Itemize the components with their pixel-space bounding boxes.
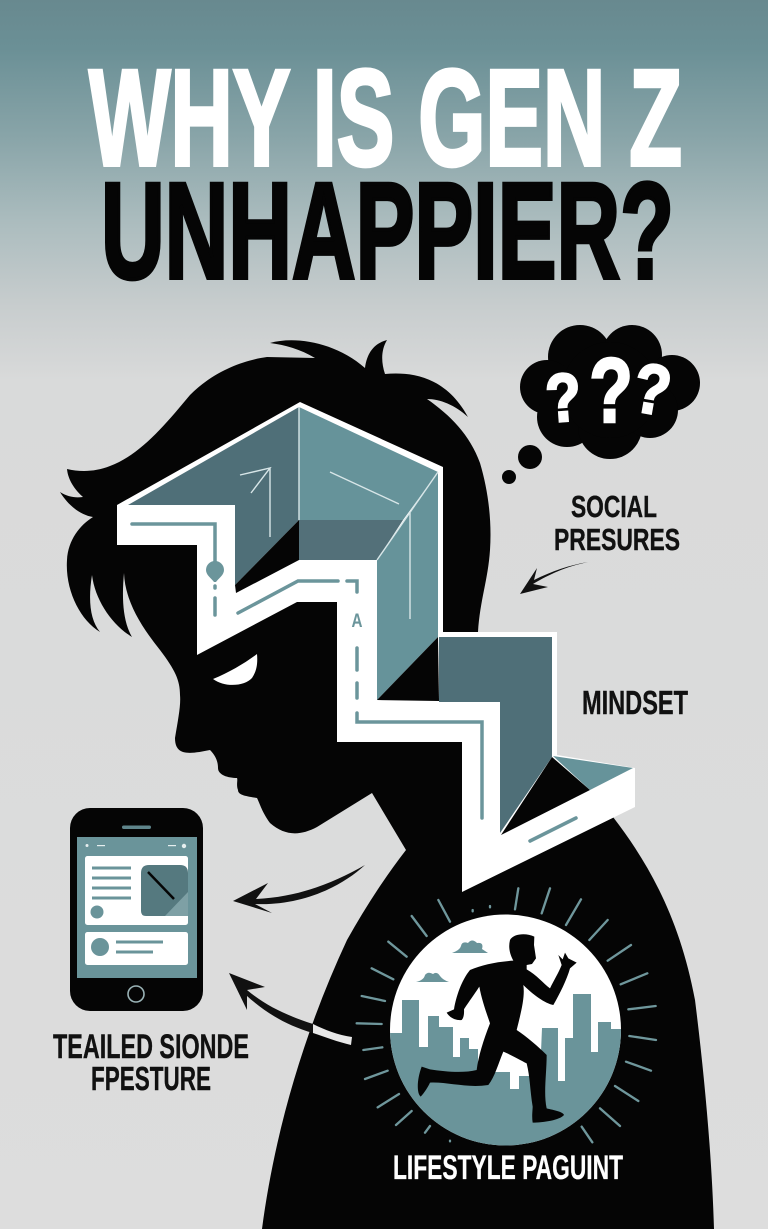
image corner shade	[165, 892, 188, 916]
mid dark floor panel	[299, 520, 403, 560]
lifestyle medallion	[357, 888, 656, 1150]
phone screen	[77, 837, 197, 978]
clouds	[416, 940, 488, 982]
letter A marker: A	[352, 611, 363, 632]
location pin icon	[206, 561, 224, 582]
silhouette: head and shoulders	[60, 340, 714, 1229]
medallion disc	[390, 914, 621, 1146]
title	[89, 42, 682, 308]
staircase diagram in the head	[117, 402, 635, 892]
label: teailed sionde fpesture	[53, 1028, 249, 1097]
question marks	[543, 339, 677, 442]
content card 1	[85, 856, 188, 925]
label: lifestyle paguint: LIFESTYLE PAGUINT	[393, 1149, 623, 1187]
white staircase outline	[117, 402, 635, 892]
light right wall	[377, 472, 438, 700]
phone body	[70, 808, 203, 1011]
label: teailed sionde fpesture: TEAILED SIONDE	[53, 1028, 249, 1066]
arrow: towards phone lower	[229, 973, 352, 1045]
running figure	[418, 934, 577, 1123]
label: mindset: MINDSET	[582, 684, 688, 721]
thought cloud	[502, 325, 700, 484]
question marks: ?	[627, 347, 677, 431]
city skyline	[385, 994, 625, 1150]
teal route lines on the staircase	[132, 524, 576, 841]
card 1 avatar	[90, 906, 104, 918]
question marks: ?	[543, 360, 584, 437]
label: social presures: PRESURES	[554, 522, 680, 557]
thin white panel lines	[240, 407, 438, 619]
label: social presures: SOCIAL	[571, 489, 657, 524]
arrow: towards phone upper	[233, 865, 365, 913]
arrow shaft and head	[229, 973, 313, 1033]
dark lower panel	[439, 637, 552, 833]
radiating rays	[357, 888, 656, 1142]
card 2 avatar	[91, 938, 109, 956]
dark left wall	[128, 407, 299, 585]
eye	[213, 654, 257, 685]
teal lower triangle	[553, 756, 633, 790]
label: teailed sionde fpesture: FPESTURE	[91, 1060, 211, 1097]
light ceiling panel	[299, 407, 438, 520]
black wedge middle	[377, 637, 439, 701]
status bar	[86, 844, 186, 848]
black wedge lower	[501, 757, 590, 835]
white shaft end on shoulder	[313, 1024, 352, 1045]
question marks: ?	[589, 339, 633, 442]
cloud shape	[502, 325, 700, 484]
arrow: social presures	[520, 562, 588, 594]
image diagonal line	[148, 872, 174, 899]
card 2 lines	[116, 942, 163, 952]
phone icon	[70, 808, 203, 1011]
card 1 text lines	[92, 868, 131, 898]
label: social presures	[554, 489, 680, 557]
card 1 image	[141, 865, 188, 916]
black wedge upper	[235, 520, 299, 593]
content card 2	[85, 932, 188, 965]
speaker	[122, 826, 151, 829]
home button	[128, 986, 144, 1002]
